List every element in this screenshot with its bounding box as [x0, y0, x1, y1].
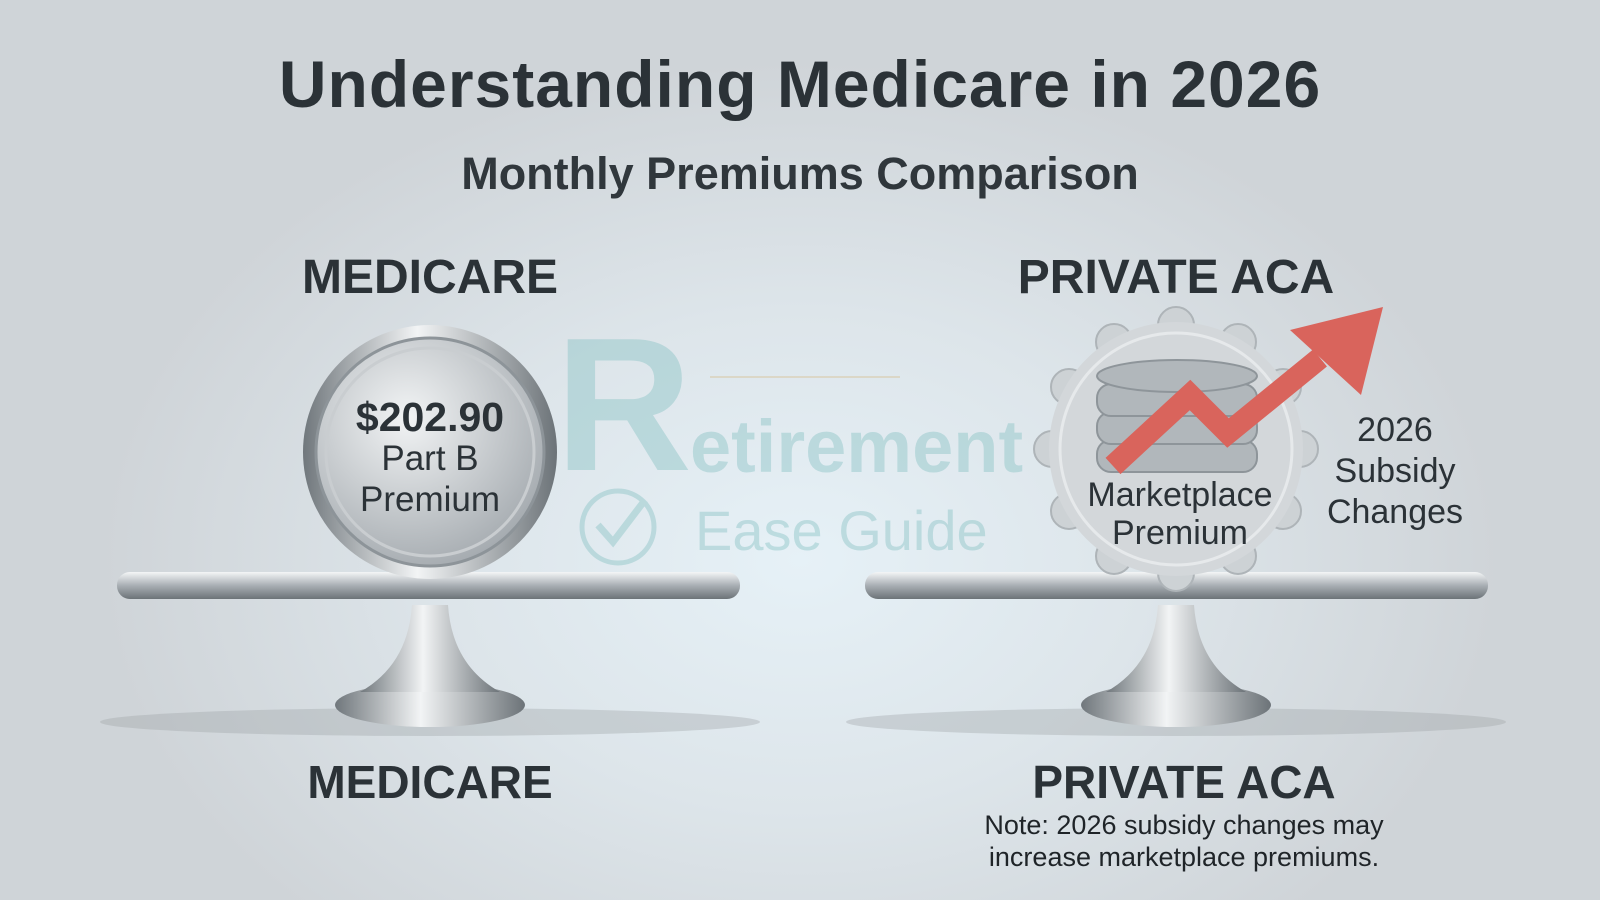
callout: subsidy changes: Changes: [1327, 493, 1463, 531]
badge text: Marketplace: [1087, 476, 1273, 514]
coin text: [356, 394, 504, 519]
scale: medicare: [100, 325, 760, 736]
coin text: Part B: [381, 439, 479, 478]
heading: medicare: MEDICARE: [302, 251, 558, 304]
watermark: R: [555, 299, 692, 511]
coin text: Premium: [360, 480, 500, 519]
label: private aca: PRIVATE ACA: [1032, 756, 1336, 808]
title: Understanding Medicare in 2026: [279, 47, 1321, 121]
badge text: Premium: [1112, 514, 1248, 552]
subtitle: Monthly Premiums Comparison: [461, 148, 1139, 199]
note: increase marketplace premiums.: [989, 842, 1379, 872]
callout: subsidy changes: [1327, 411, 1463, 531]
callout: subsidy changes: Subsidy: [1335, 452, 1455, 490]
label: medicare: MEDICARE: [307, 756, 553, 808]
note: Note: 2026 subsidy changes may: [984, 810, 1384, 840]
coin text: $202.90: [356, 394, 504, 440]
watermark: etirement: [690, 405, 1023, 488]
heading: private aca: PRIVATE ACA: [1018, 251, 1334, 304]
badge text: [1087, 476, 1273, 552]
watermark: Ease Guide: [695, 499, 988, 562]
callout: subsidy changes: 2026: [1357, 411, 1433, 449]
note: [984, 810, 1384, 872]
